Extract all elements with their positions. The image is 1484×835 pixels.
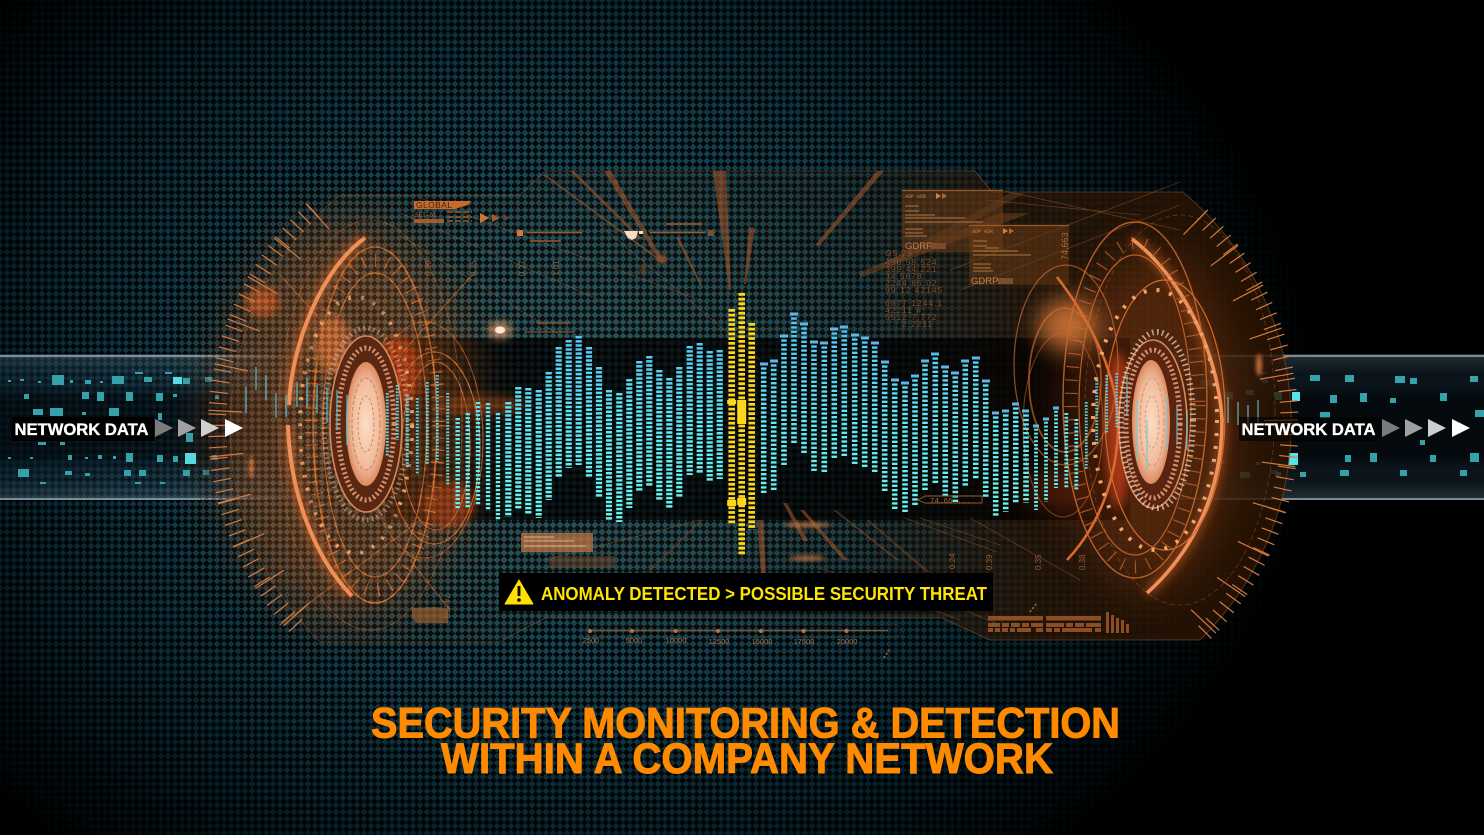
numeric readout column: 496 58.524 [885, 257, 938, 267]
frequency axis [583, 625, 901, 646]
left eye mesh rings [278, 220, 483, 630]
title: WITHIN A COMPANY NETWORK [441, 735, 1053, 783]
title [371, 700, 1120, 783]
top-left HUD readout: global: SET-01 [415, 212, 437, 219]
rotated axis readings top: 0.35 [469, 260, 478, 276]
title: SECURITY MONITORING & DETECTION [371, 700, 1120, 748]
right eye thick outer arc [1132, 239, 1222, 593]
left label: network data: NETWORK DATA [14, 420, 148, 439]
HUD hull panel [230, 171, 1291, 642]
numeric readout column [885, 248, 943, 329]
anomaly alert banner: ANOMALY DETECTED > POSSIBLE SECURITY THREAT [541, 583, 988, 604]
left eye core [324, 328, 408, 520]
top HUD targeting marks [489, 224, 714, 337]
right radial tick ring [1195, 216, 1290, 636]
left flow arrows [155, 419, 243, 437]
frequency axis: 5000 [626, 636, 642, 645]
right label: network data: NETWORK DATA [1242, 420, 1376, 439]
HUD thin diagonal lines [400, 182, 1180, 625]
frequency axis: 17500 [794, 637, 814, 646]
rotated axis readings top: 0.39 [424, 260, 433, 276]
top-left HUD readout: global [414, 200, 509, 223]
waveform: anomalous yellow bars [732, 293, 752, 555]
right flow arrows [1382, 419, 1470, 437]
frequency axis: 20000 [837, 637, 857, 646]
frequency axis: 12500 [709, 637, 729, 646]
left network data band [0, 354, 287, 500]
data panel two: 74,663 [1060, 232, 1070, 260]
dark waveform backing band [385, 338, 1130, 520]
faint signal traces left of waveform [246, 367, 347, 445]
data panel two [969, 225, 1070, 287]
rotated axis readings top: 74,663 [442, 594, 451, 619]
numeric readout column: 42211 # [885, 305, 922, 315]
rotated axis readings top: 0.24 [948, 553, 957, 569]
bottom right meter blocks [884, 604, 1129, 658]
numeric readout column: 5512 7.772 [885, 312, 938, 322]
rotated axis readings top: 0.39 [985, 554, 994, 570]
waveform tag readout [918, 496, 982, 506]
anomaly alert banner [499, 573, 993, 611]
top-left HUD readout: global: GLOBAL [416, 200, 452, 210]
numeric readout column: 6877 1244.1 [885, 298, 943, 308]
data panel one [902, 190, 1003, 252]
frequency axis: 15000 [752, 637, 772, 646]
rotated axis readings top: 0.37 [518, 260, 527, 276]
numeric readout column: .... 2.2211 [885, 319, 933, 329]
HUD light beams and diagonal lines [543, 171, 1030, 574]
rotated axis readings top: 1.01 [552, 260, 561, 276]
rotated axis readings top [424, 260, 1087, 619]
right eye inner sweeping arc [1057, 277, 1118, 560]
numeric readout column: 34 5678 [885, 271, 923, 281]
bottom left orange data blocks [412, 522, 831, 623]
faint signal traces right of waveform [1127, 375, 1258, 470]
data panel two: ADP ADR [972, 229, 993, 235]
left radial tick ring [217, 210, 318, 627]
numeric readout column: G5.23 [885, 248, 913, 258]
frequency axis: 10000 [666, 636, 686, 645]
right sensor eye [1014, 215, 1275, 605]
numeric readout column: 399 44.221 [885, 264, 938, 274]
rotated axis readings top: 0.35 [1034, 554, 1043, 570]
checker overlay on left eye [200, 194, 516, 642]
rotated axis readings top: 0.38 [1078, 554, 1087, 570]
left eye thick outer arc [288, 238, 365, 596]
waveform tag readout: 74.66 ... [930, 498, 971, 506]
left sensor eye [215, 220, 525, 630]
left eye arc core [288, 238, 365, 596]
data panel one: ADP ADR [905, 194, 926, 200]
data panel one: GDRP [905, 241, 932, 252]
numeric readout column: 2244 86.02 [885, 278, 938, 288]
waveform: anomaly spectrum bars [387, 313, 1117, 522]
right network data band [1184, 354, 1484, 500]
numeric readout column: 99.12 42145 [885, 285, 943, 295]
data panel two: GDRP [971, 276, 998, 287]
frequency axis: 2500 [583, 636, 599, 645]
right eye core [1119, 340, 1187, 508]
icon: warning triangle [505, 580, 533, 604]
right eye mesh rings [1014, 215, 1275, 605]
right eye arc core [1132, 239, 1222, 593]
